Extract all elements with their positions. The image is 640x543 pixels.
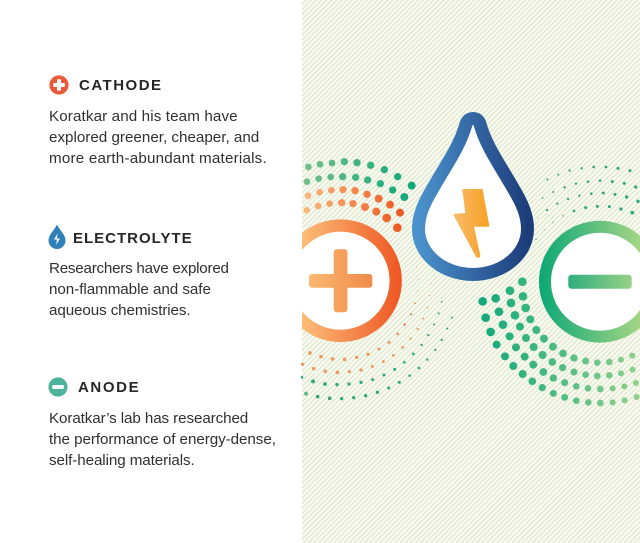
icon: cathode plus [49, 75, 69, 95]
text: electrolyte description [49, 260, 229, 319]
dots: upper-right arcs [535, 166, 640, 240]
electrolyte drop [418, 118, 528, 274]
dots: lower-left arcs [301, 267, 453, 400]
text: cathode description: Koratkar and his team have [49, 108, 238, 125]
heading: anode: ANODE [78, 379, 140, 396]
section: anode [48, 377, 276, 469]
text: cathode description: explored greener, cheaper, and [49, 129, 259, 146]
text: electrolyte description: aqueous chemistries. [49, 302, 191, 319]
dots: lower-right arcs [478, 277, 640, 406]
text: electrolyte description: non-flammable and safe [49, 281, 211, 298]
illustration panel [300, 0, 640, 543]
dots: upper-left arcs [303, 158, 416, 232]
heading: electrolyte: ELECTROLYTE [73, 230, 193, 247]
anode symbol [545, 227, 640, 337]
section: electrolyte [48, 224, 229, 319]
text: cathode description: more earth-abundant materials. [49, 150, 267, 167]
text: anode description: Koratkar’s lab has researched [49, 410, 248, 427]
text: cathode description [49, 108, 267, 167]
text: anode description [49, 410, 276, 469]
icon: lightning bolt [454, 190, 488, 257]
text: electrolyte description: Researchers have explored [49, 260, 229, 277]
text: anode description: the performance of energy-dense, [49, 431, 276, 448]
text: anode description: self-healing materials. [49, 452, 195, 469]
icon: anode minus [48, 377, 68, 397]
cathode symbol [285, 226, 396, 336]
section: cathode [49, 75, 267, 167]
heading: cathode: CATHODE [79, 77, 163, 94]
icon: electrolyte drop [48, 224, 66, 249]
